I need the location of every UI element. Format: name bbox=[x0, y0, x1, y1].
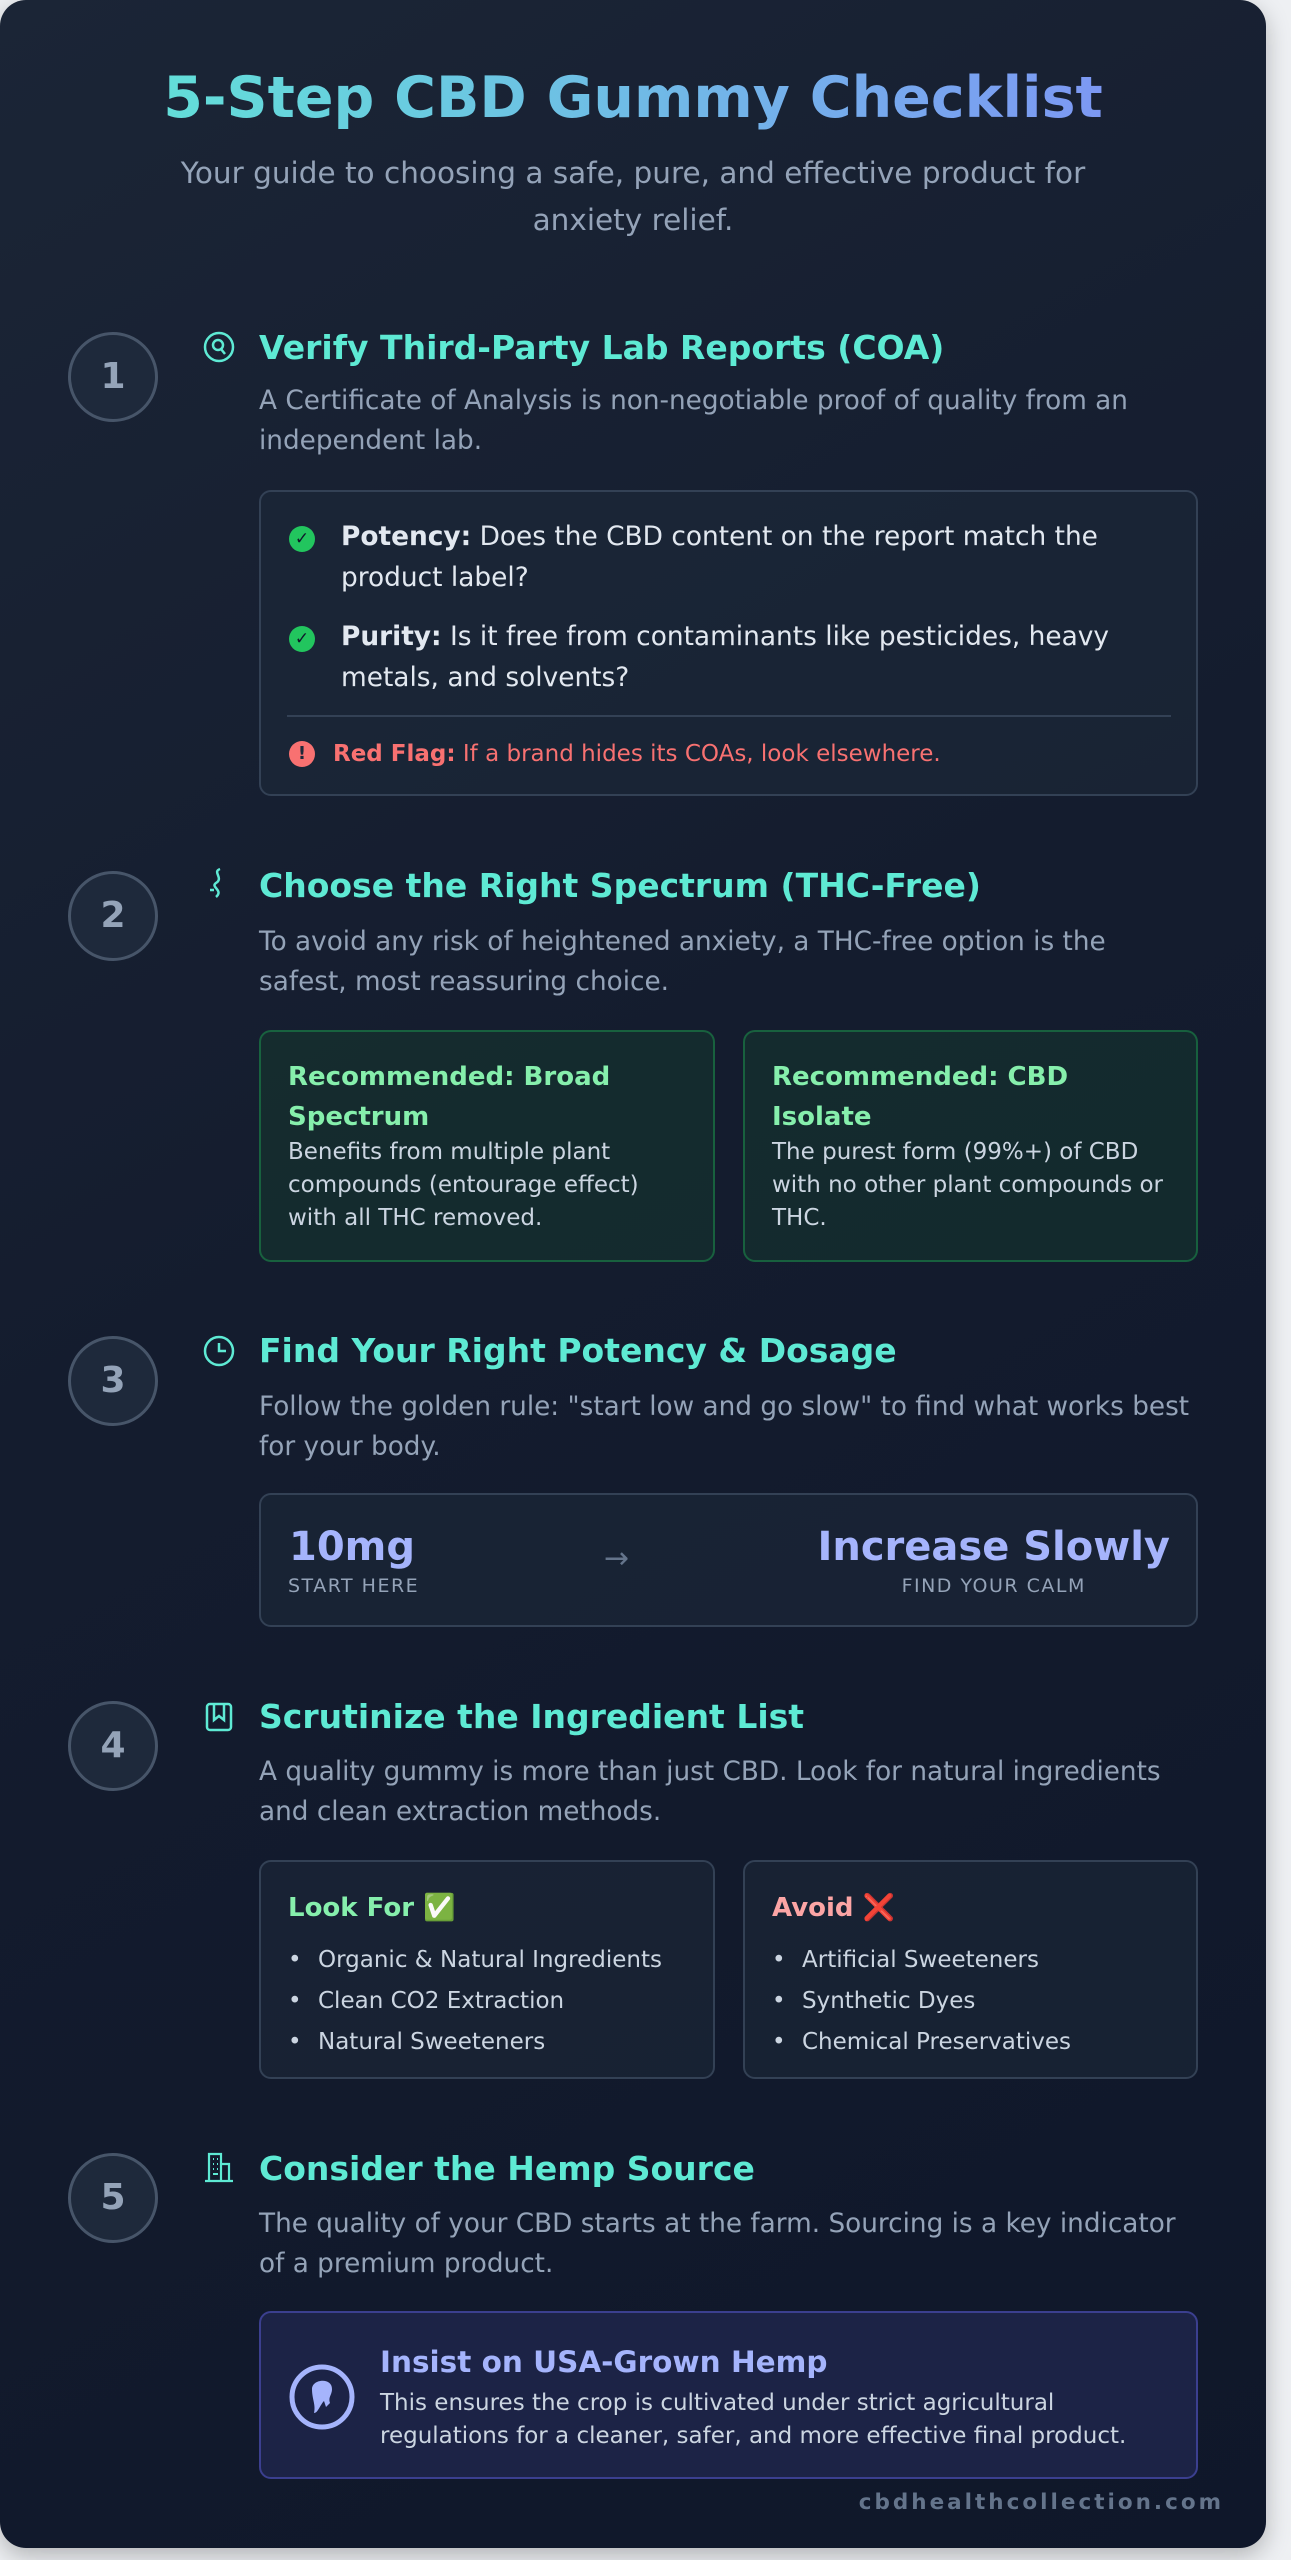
panel: COA checks bbox=[259, 490, 1198, 796]
panel: avoid: Artificial Sweeteners bbox=[802, 1947, 1039, 1973]
callout: USA-grown hemp bbox=[259, 2311, 1198, 2479]
panel: broad spectrum: Recommended: Broad Spectrum bbox=[288, 1062, 610, 1132]
icon: clock bbox=[204, 1336, 234, 1366]
panel: dosage bbox=[259, 1493, 1198, 1627]
increase slowly: Increase Slowly bbox=[817, 1524, 1170, 1570]
step 2 description: To avoid any risk of heightened anxiety, a THC-free option is the safest, most reassuring choice. bbox=[259, 927, 1106, 997]
check item purity: Purity: Is it free from contaminants like pesticides, heavy metals, and solvents? bbox=[341, 621, 1109, 693]
panel: CBD isolate: Recommended: CBD Isolate bbox=[772, 1062, 1068, 1132]
footer: website: cbdhealthcollection.com bbox=[859, 2490, 1224, 2515]
icon: bookmark bbox=[206, 1702, 232, 1732]
step 1 heading: Verify Third-Party Lab Reports (COA) bbox=[259, 328, 944, 367]
step 3 number bbox=[68, 1336, 158, 1426]
icon: lab search bbox=[204, 332, 234, 362]
step 1 description: A Certificate of Analysis is non-negotiable proof of quality from an independent lab. bbox=[259, 386, 1128, 456]
title bbox=[0, 60, 1266, 136]
red flag warning: Red Flag: If a brand hides its COAs, look elsewhere. bbox=[333, 741, 941, 767]
step 4 number bbox=[68, 1701, 158, 1791]
panel: CBD isolate bbox=[743, 1030, 1198, 1262]
check item purity: ✓ bbox=[295, 629, 309, 649]
step 1 number bbox=[68, 332, 158, 422]
panel: avoid: Chemical Preservatives bbox=[802, 2029, 1071, 2055]
icon: farm building bbox=[205, 2152, 233, 2182]
increase slowly bbox=[817, 1524, 1170, 1597]
step 5 number bbox=[68, 2153, 158, 2243]
increase slowly: FIND YOUR CALM bbox=[902, 1575, 1086, 1597]
icon: USA map bbox=[290, 2364, 354, 2430]
panel: avoid: Avoid ❌ bbox=[772, 1893, 895, 1923]
panel: look for: Organic & Natural Ingredients bbox=[318, 1947, 662, 1973]
callout: USA-grown hemp: Insist on USA-Grown Hemp bbox=[380, 2345, 828, 2379]
step 5 description: The quality of your CBD starts at the farm. Sourcing is a key indicator of a premium product. bbox=[259, 2209, 1176, 2279]
step 4 description: A quality gummy is more than just CBD. Look for natural ingredients and clean extraction methods. bbox=[259, 1757, 1161, 1827]
subtitle: Your guide to choosing a safe, pure, and effective product for anxiety relief. bbox=[181, 156, 1085, 237]
step 5 heading: Consider the Hemp Source bbox=[259, 2149, 755, 2188]
panel: CBD isolate: The purest form (99%+) of CBD with no other plant compounds or THC. bbox=[772, 1139, 1163, 1231]
panel: broad spectrum bbox=[259, 1030, 715, 1262]
step 2 number bbox=[68, 871, 158, 961]
icon: leaf/spectrum bbox=[210, 868, 220, 898]
step 3 description: Follow the golden rule: "start low and go slow" to find what works best for your body. bbox=[259, 1392, 1189, 1462]
check item potency: ✓ bbox=[295, 529, 309, 549]
step 5 number: 5 bbox=[100, 2177, 126, 2218]
panel: avoid bbox=[743, 1860, 1198, 2079]
step 1 number: 1 bbox=[100, 356, 126, 397]
step 3 heading: Find Your Right Potency & Dosage bbox=[259, 1331, 897, 1370]
step 4 heading: Scrutinize the Ingredient List bbox=[259, 1697, 804, 1736]
title: 5-Step CBD Gummy Checklist bbox=[163, 65, 1103, 131]
panel: avoid: Synthetic Dyes bbox=[802, 1988, 975, 2014]
step 4 number: 4 bbox=[100, 1725, 126, 1766]
red flag warning: ! bbox=[298, 743, 306, 764]
start dose: 10mg bbox=[289, 1524, 415, 1570]
callout: USA-grown hemp: This ensures the crop is cultivated under strict agricultural regulations for a cleaner, safer, and more effective final product. bbox=[380, 2390, 1126, 2449]
panel: broad spectrum: Benefits from multiple plant compounds (entourage effect) with all THC removed. bbox=[288, 1139, 639, 1231]
step 3 number: 3 bbox=[100, 1360, 126, 1401]
panel: look for: Clean CO2 Extraction bbox=[318, 1988, 564, 2014]
arrow: → bbox=[604, 1541, 629, 1576]
step 2 number: 2 bbox=[100, 895, 126, 936]
step 2 heading: Choose the Right Spectrum (THC-Free) bbox=[259, 866, 981, 905]
check item potency: Potency: Does the CBD content on the report match the product label? bbox=[341, 521, 1098, 593]
panel: dosage: START HERE bbox=[288, 1575, 419, 1597]
panel: look for: Look For ✅ bbox=[288, 1893, 455, 1923]
panel: look for: Natural Sweeteners bbox=[318, 2029, 545, 2055]
panel: look for bbox=[259, 1860, 715, 2079]
